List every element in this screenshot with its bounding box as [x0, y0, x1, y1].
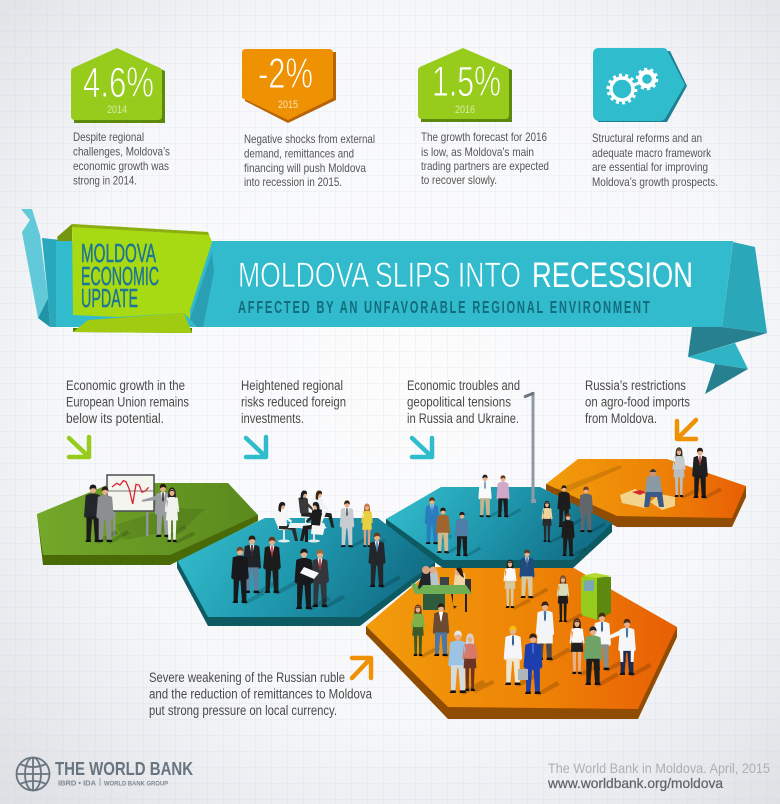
badge: 4.6%: 4.6%: [83, 59, 154, 107]
person: man in white shirt: [593, 613, 627, 672]
green label: MOLDOVA: [81, 238, 156, 268]
text: 2015 description: demand, remittances and: [244, 146, 354, 160]
person: worker in blue overalls: [518, 634, 560, 696]
badge: 4.6%: [71, 48, 165, 123]
people: first teal platform: [231, 491, 401, 611]
flip chart with line graph: [107, 475, 154, 536]
people: small orange platform: [620, 447, 722, 510]
green label: UPDATE: [81, 283, 138, 313]
ribbon band: [56, 241, 733, 327]
person: man in black front: [561, 514, 587, 557]
text: 2014 description: [73, 130, 170, 188]
person: man in white shirt: [478, 475, 504, 518]
callout: agro-food: from Moldova.: [585, 411, 657, 426]
person: man in grey suit: [579, 487, 606, 534]
text: 2014 description: challenges, Moldova’s: [73, 144, 170, 158]
person: man in jeans: [243, 536, 277, 595]
text: reforms description: Moldova’s growth prospects.: [592, 175, 718, 189]
people: green platform: [84, 475, 195, 544]
person: woman in green: [411, 605, 440, 658]
people: large orange platform: [411, 550, 652, 696]
person: man in navy shirt: [519, 550, 548, 600]
text: 2015 description: [244, 132, 375, 189]
meeting table with seated people: [272, 491, 334, 542]
person: man in lilac shirt: [496, 475, 521, 518]
person: man with red tie: [263, 537, 297, 595]
person: man from behind: [231, 547, 265, 605]
callout: European Union: European Union remains: [66, 394, 189, 410]
callout: Russia and Ukraine: [407, 378, 520, 457]
text: 2016 description: to recover slowly.: [421, 173, 497, 187]
text: 2016 description: is low, as Moldova's main: [421, 145, 534, 159]
text: 2014 description: Despite regional: [73, 130, 144, 144]
green label: [57, 224, 214, 333]
text: reforms description: [592, 131, 718, 189]
person: woman in grey suit: [672, 447, 700, 499]
callout: regional risks: [241, 378, 346, 457]
person: woman in white suit: [165, 488, 195, 544]
callout: agro-food: on agro-food imports: [585, 394, 690, 410]
person: elderly woman: [462, 634, 495, 693]
panel: structural reforms: [592, 48, 718, 189]
text: reforms description: Structural reforms and an: [592, 131, 702, 145]
person: man in black: [557, 485, 582, 528]
arrow: orange up-right: [352, 658, 371, 678]
platform: first teal hexagon: [177, 518, 435, 626]
text: reforms description: adequate macro framework: [592, 146, 712, 160]
text: reforms description: are essential for improving: [592, 160, 708, 174]
icon: globe: [16, 758, 50, 790]
callout: European Union: [66, 378, 189, 457]
platform: green hexagon: [37, 483, 258, 565]
logo: The World Bank: WORLD BANK GROUP: [104, 780, 169, 788]
platform: large orange hexagon: [366, 567, 677, 719]
boxes: [620, 489, 675, 510]
callout: agro-food: [585, 378, 696, 439]
desk with workers: [411, 566, 472, 612]
person: doctor with navy trousers: [607, 619, 652, 677]
callout: European Union: Economic growth in the: [66, 378, 185, 393]
callout: Russia and Ukraine: geopolitical tensions: [407, 394, 511, 410]
text: 2015 description: into recession in 2015.: [244, 175, 342, 189]
title: MOLDOVA SLIPS INTO: [238, 256, 521, 295]
callout: regional risks: investments.: [241, 411, 304, 426]
callout: Russian ruble: put strong pressure on local currency.: [149, 703, 337, 718]
footer source: [547, 760, 770, 791]
person: doctor: [536, 601, 571, 662]
callout: Russian ruble: Severe weakening of the Russian ruble: [149, 670, 345, 685]
platform: small orange hexagon: [546, 459, 746, 527]
badge: 4.6%: 2014: [107, 104, 127, 116]
person: presenter: [142, 484, 186, 539]
text: 2016 description: [421, 130, 549, 187]
street lamp: [524, 392, 536, 503]
badge: -2%: -2%: [258, 50, 313, 98]
title: RECESSION: [532, 256, 693, 295]
ATM: [581, 573, 611, 620]
person: woman in black skirt: [570, 618, 601, 676]
person: woman in white top: [504, 560, 531, 610]
green label: ECONOMIC: [81, 261, 159, 291]
person: man in brown jacket: [433, 603, 464, 658]
person: man with red tie: [692, 448, 722, 500]
person: builder: [504, 626, 539, 687]
person: woman in yellow dress: [361, 503, 386, 548]
person: man in blue tie: [368, 533, 401, 589]
badge: 1.5%: 1.5%: [432, 58, 501, 106]
panel: 2014 growth: [71, 48, 170, 188]
arrow: green: [69, 437, 89, 457]
subtitle: AFFECTED BY AN UNFAVORABLE REGIONAL ENVIRONMENT: [238, 297, 650, 318]
text: 2016 description: trading partners are expected: [421, 159, 549, 173]
person: man in light grey suit: [340, 500, 368, 549]
people: second teal platform: [425, 392, 606, 557]
arrow: teal right: [412, 438, 432, 457]
person: man in grey jacket: [96, 486, 130, 544]
arrow: teal left: [246, 437, 266, 457]
text: 2015 description: financing will push Moldova: [244, 161, 366, 175]
arrow: orange down-left: [677, 420, 696, 439]
person: seated man: [644, 469, 664, 507]
person: man in green shirt: [584, 626, 619, 687]
badge: 1.5%: [418, 48, 512, 122]
logo: The World Bank: IBRD • IDA: [58, 778, 97, 788]
ribbon right folds: [688, 242, 767, 394]
callout: regional risks: Heightened regional: [241, 378, 343, 393]
person: elderly man: [448, 631, 485, 695]
badge: -2%: [242, 49, 336, 123]
logo: The World Bank: [16, 758, 193, 790]
callout: European Union: below its potential.: [66, 411, 164, 426]
ribbon left folds: [21, 209, 80, 327]
callout: Russian ruble: [149, 658, 372, 718]
icon: gears tag: [593, 48, 687, 122]
person: man in black: [84, 485, 118, 544]
badge: 1.5%: 2016: [455, 104, 475, 116]
panel: 2016 forecast: [418, 48, 549, 187]
person: woman in cream top: [541, 501, 565, 543]
person: man in dark grey suit: [311, 550, 345, 609]
footer source: www.worldbank.org/moldova: [547, 775, 723, 791]
callout: Russia and Ukraine: in Russia and Ukraine.: [407, 411, 519, 426]
person: man in blue shirt: [455, 512, 481, 557]
callout: Russia and Ukraine: Economic troubles and: [407, 378, 520, 393]
text: 2014 description: economic growth was: [73, 159, 169, 173]
person: woman in cream jacket: [557, 575, 583, 624]
badge: -2%: 2015: [278, 99, 298, 111]
text: 2014 description: strong in 2014.: [73, 174, 137, 188]
panel: 2015 recession: [242, 49, 375, 189]
banner ribbon: [21, 209, 767, 394]
text: 2016 description: The growth forecast for 2016: [421, 130, 547, 144]
callout: Russian ruble: and the reduction of remittances to Moldova: [149, 686, 372, 702]
person: man in brown jacket: [436, 508, 463, 554]
person: man holding papers: [295, 548, 331, 611]
callout: agro-food: Russia’s restrictions: [585, 378, 686, 393]
text: 2015 description: Negative shocks from external: [244, 132, 375, 146]
logo: The World Bank: THE WORLD BANK: [55, 759, 193, 779]
person: man in blue suit: [425, 497, 453, 546]
platform: second teal hexagon: [386, 487, 612, 568]
callout: regional risks: risks reduced foreign: [241, 394, 346, 410]
